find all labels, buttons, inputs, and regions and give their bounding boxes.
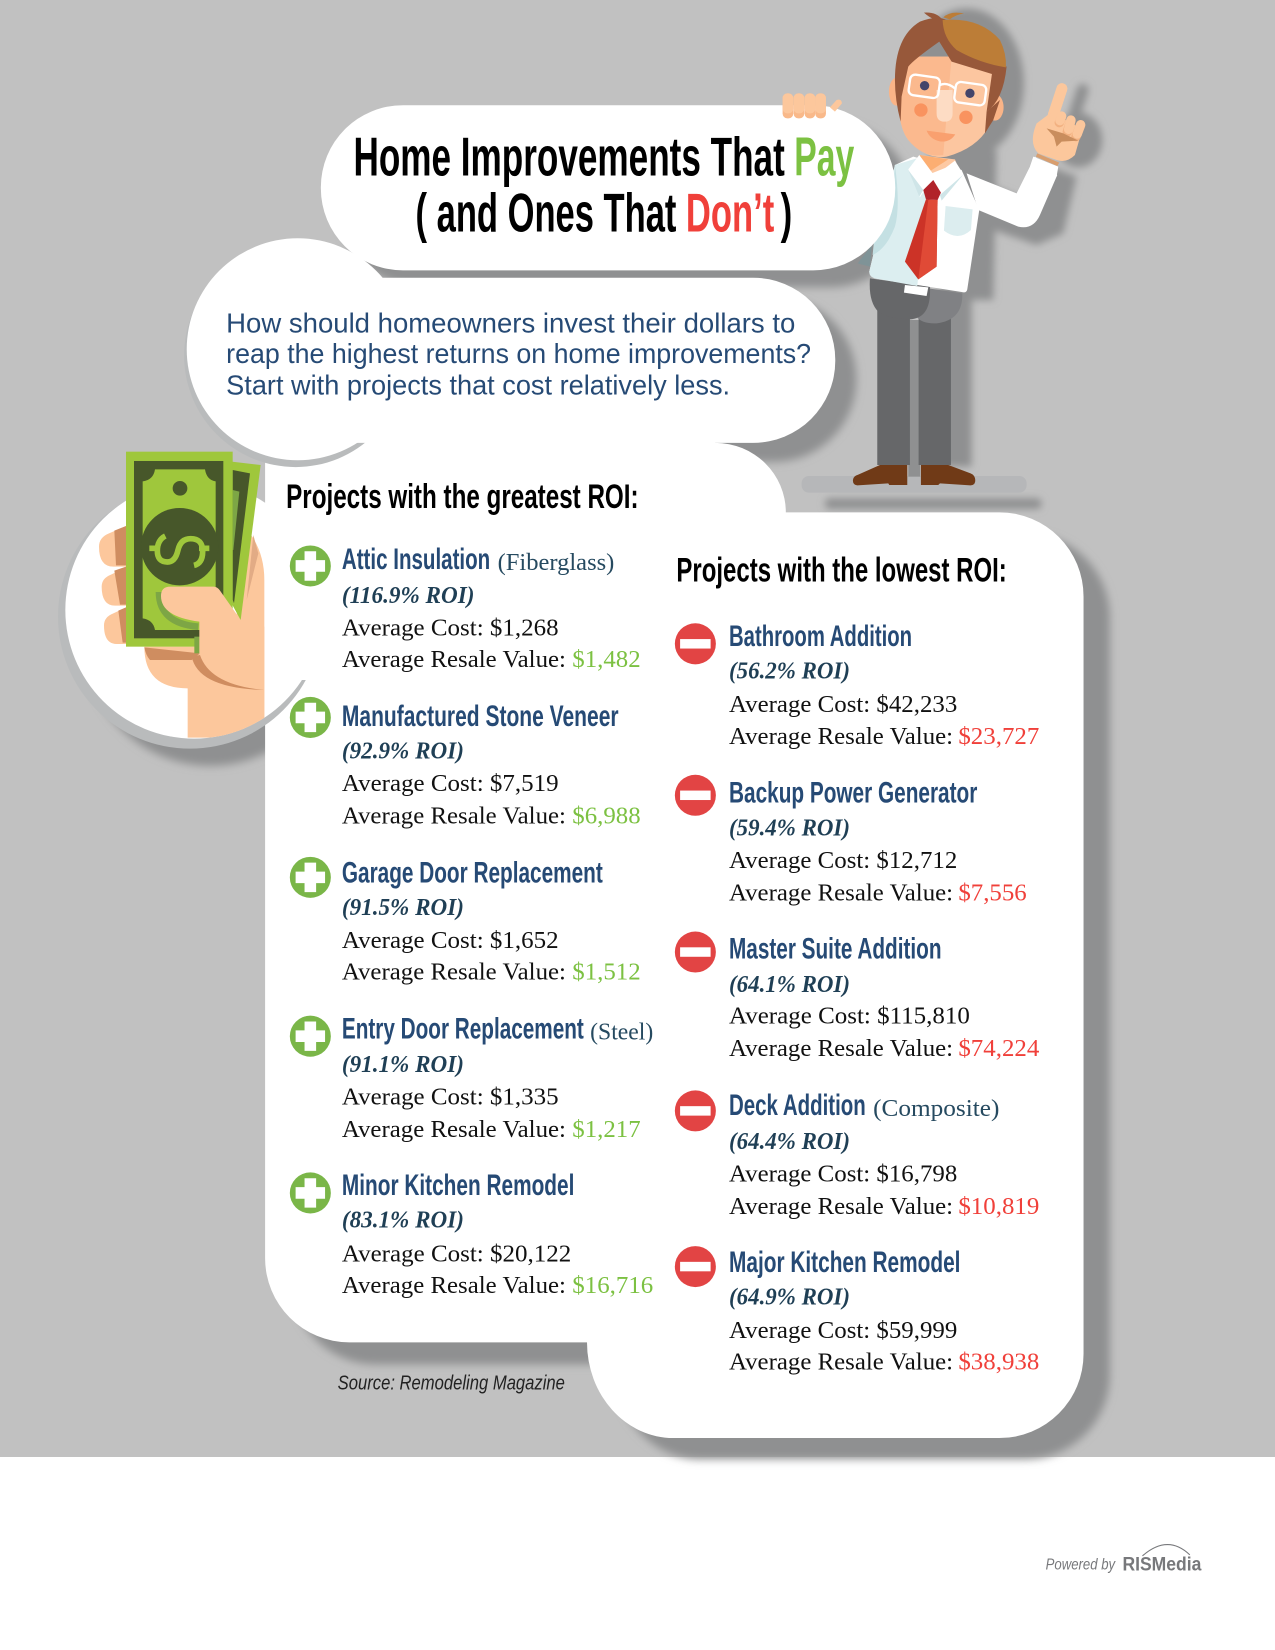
panel: lowest ROI background <box>587 512 1084 1438</box>
heading: greatest ROI: Projects with the greatest ROI: <box>286 478 639 516</box>
item: Minor Kitchen Remodel: (83.1% ROI) <box>342 1207 464 1234</box>
item: Manufactured Stone Veneer: (92.9% ROI) <box>342 737 464 764</box>
item: Garage Door Replacement: (91.5% ROI) <box>342 894 464 921</box>
item: Entry Door Replacement <box>290 1012 653 1143</box>
icon: plus <box>290 697 331 738</box>
right panel shadow <box>610 533 1110 1459</box>
item: Backup Power Generator: (59.4% ROI) <box>729 814 850 841</box>
shirt <box>858 157 1057 296</box>
icon: minus <box>675 1246 716 1287</box>
title <box>353 126 855 243</box>
item: Attic Insulation: Average Cost: $1,268 <box>342 614 559 641</box>
icon: plus <box>290 857 331 898</box>
item: Master Suite Addition: Average Cost: $115,810 <box>729 1003 970 1030</box>
item: Bathroom Addition: $23,727 <box>958 723 1039 750</box>
item: Major Kitchen Remodel <box>675 1246 1039 1376</box>
icon: plus <box>290 1172 331 1213</box>
intro circle overlap <box>210 249 381 316</box>
item: Deck Addition: (64.4% ROI) <box>729 1128 850 1155</box>
icon: minus <box>675 932 716 973</box>
item: Garage Door Replacement: Average Resale Value: <box>342 958 566 985</box>
panel: intro bubble <box>184 238 835 467</box>
item: Deck Addition: Average Cost: $16,798 <box>729 1160 957 1187</box>
item: Attic Insulation: (116.9% ROI) <box>342 582 474 609</box>
item: Backup Power Generator: Backup Power Generator <box>729 777 978 810</box>
item: Minor Kitchen Remodel: Minor Kitchen Remodel <box>342 1169 574 1202</box>
item: Master Suite Addition: $74,224 <box>958 1035 1039 1062</box>
source note: Source: Remodeling Magazine <box>338 1373 565 1395</box>
item: Entry Door Replacement: (Steel) <box>590 1018 653 1045</box>
item: Entry Door Replacement: $1,217 <box>572 1116 641 1143</box>
item: Entry Door Replacement: Entry Door Replacement <box>342 1012 584 1045</box>
item: Manufactured Stone Veneer: Manufactured Stone Veneer <box>342 700 619 733</box>
intro text <box>226 307 811 400</box>
item: Manufactured Stone Veneer: $6,988 <box>572 803 641 830</box>
intro bubble shadow <box>252 297 856 462</box>
intro text: Start with projects that cost relatively less. <box>226 369 730 400</box>
intro text: How should homeowners invest their dollars to <box>226 307 795 338</box>
item: Backup Power Generator <box>675 775 1027 906</box>
list: greatest ROI projects <box>290 543 653 1299</box>
icon: plus <box>290 545 331 586</box>
panel: title bubble <box>321 105 895 270</box>
ground bar <box>802 476 1027 493</box>
item: Backup Power Generator: Average Cost: $12,712 <box>729 847 957 874</box>
item: Major Kitchen Remodel: Major Kitchen Remodel <box>729 1246 960 1279</box>
item: Attic Insulation: $1,482 <box>572 646 641 673</box>
title bubble shadow <box>339 122 913 287</box>
hand gripping bubble <box>783 93 842 118</box>
panel: greatest ROI background <box>265 400 786 1342</box>
item: Backup Power Generator: Average Resale Value: <box>729 879 953 906</box>
item: Deck Addition <box>675 1089 1039 1220</box>
item: Minor Kitchen Remodel: Average Cost: $20,122 <box>342 1240 571 1267</box>
hand pointing up <box>1030 89 1082 177</box>
icon: minus <box>675 1090 716 1131</box>
item: Minor Kitchen Remodel <box>290 1169 653 1299</box>
icon: minus <box>675 775 716 816</box>
logo: Powered by RISMedia: Powered by <box>1046 1557 1116 1574</box>
item: Major Kitchen Remodel: (64.9% ROI) <box>729 1283 850 1310</box>
item: Deck Addition: $10,819 <box>958 1193 1039 1220</box>
item: Entry Door Replacement: Average Cost: $1,335 <box>342 1084 559 1111</box>
neck and collar <box>908 155 963 201</box>
item: Bathroom Addition: Bathroom Addition <box>729 620 912 653</box>
item: Deck Addition: (Composite) <box>873 1095 999 1122</box>
title: Home Improvements That <box>353 126 785 188</box>
item: Minor Kitchen Remodel: Average Resale Value: <box>342 1272 566 1299</box>
shoes <box>853 465 975 485</box>
item: Manufactured Stone Veneer: Average Resale Value: <box>342 803 566 830</box>
item: Bathroom Addition: Average Resale Value: <box>729 723 953 750</box>
legs <box>870 278 962 477</box>
item: Attic Insulation: (Fiberglass) <box>498 549 614 576</box>
logo: Powered by RISMedia <box>1046 1545 1202 1576</box>
item: Master Suite Addition <box>675 932 1039 1062</box>
left panel shadow <box>291 947 631 1364</box>
item: Attic Insulation: Attic Insulation <box>342 543 490 576</box>
item: Entry Door Replacement: (91.1% ROI) <box>342 1051 464 1078</box>
intro text: reap the highest returns on home improvements? <box>226 338 811 369</box>
hand circle shadow <box>84 513 337 766</box>
title: Don’t <box>686 181 774 243</box>
heading: lowest ROI: Projects with the lowest ROI: <box>676 552 1007 590</box>
item: Major Kitchen Remodel: Average Cost: $59,999 <box>729 1317 957 1344</box>
item: Garage Door Replacement: Garage Door Replacement <box>342 857 603 890</box>
icon: minus <box>675 623 716 664</box>
item: Master Suite Addition: Average Resale Value: <box>729 1035 953 1062</box>
item: Bathroom Addition: (56.2% ROI) <box>729 658 850 685</box>
icon: hand holding cash <box>58 452 323 749</box>
item: Garage Door Replacement <box>290 857 641 985</box>
title: ( and Ones That <box>416 181 676 243</box>
item: Minor Kitchen Remodel: $16,716 <box>572 1272 653 1299</box>
item: Attic Insulation <box>290 543 641 673</box>
list: lowest ROI projects <box>675 620 1039 1376</box>
character shadow <box>825 8 1102 509</box>
item: Backup Power Generator: $7,556 <box>958 879 1027 906</box>
icon: plus <box>290 1016 331 1057</box>
title: Pay <box>794 126 855 188</box>
item: Entry Door Replacement: Average Resale Value: <box>342 1116 566 1143</box>
item: Garage Door Replacement: Average Cost: $1,652 <box>342 927 559 954</box>
item: Attic Insulation: Average Resale Value: <box>342 646 566 673</box>
item: Deck Addition: Average Resale Value: <box>729 1193 953 1220</box>
tie <box>905 180 941 279</box>
logo: Powered by RISMedia: RISMedia <box>1122 1555 1202 1576</box>
item: Major Kitchen Remodel: $38,938 <box>958 1349 1039 1376</box>
item: Manufactured Stone Veneer: Average Cost: $7,519 <box>342 770 559 797</box>
character: man in shirt and tie <box>802 13 1082 493</box>
item: Bathroom Addition <box>675 620 1039 750</box>
item: Master Suite Addition: Master Suite Addition <box>729 932 942 965</box>
item: Bathroom Addition: Average Cost: $42,233 <box>729 691 957 718</box>
item: Deck Addition: Deck Addition <box>729 1089 866 1122</box>
item: Master Suite Addition: (64.1% ROI) <box>729 971 850 998</box>
item: Manufactured Stone Veneer <box>290 697 641 830</box>
item: Garage Door Replacement: $1,512 <box>572 958 641 985</box>
head <box>889 13 1007 157</box>
item: Major Kitchen Remodel: Average Resale Value: <box>729 1349 953 1376</box>
title: ) <box>781 181 792 243</box>
